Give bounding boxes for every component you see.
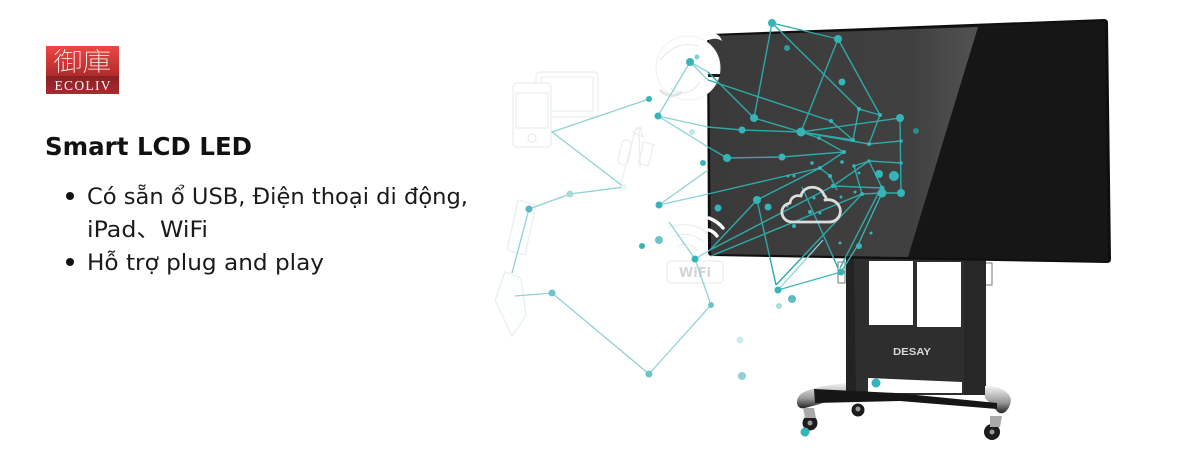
icon: cloud	[782, 187, 840, 222]
screen dark side	[709, 21, 1108, 261]
monitor frame	[707, 19, 1111, 263]
brand label: DESAY	[893, 346, 931, 358]
logo: Ecoliv	[46, 42, 119, 94]
corner highlight	[706, 33, 722, 41]
logo: Ecoliv: 御庫	[54, 42, 112, 79]
faint device icons	[495, 72, 723, 336]
icon: globe overlapping screen	[656, 36, 720, 100]
heading: Smart LCD LED	[45, 132, 252, 161]
network nodes	[526, 19, 919, 436]
icon: tablet	[536, 72, 598, 117]
logo: Ecoliv: ECOLIV	[54, 78, 111, 93]
stand crossbar	[814, 389, 997, 409]
stand brackets	[838, 262, 992, 285]
wifi arcs on screen	[709, 218, 723, 236]
bullet item: connectivity: Có sẵn ổ USB, Điện thoại di động,	[87, 184, 468, 210]
bullet item: connectivity: iPad、WiFi	[87, 218, 208, 243]
bullet item: connectivity	[66, 184, 468, 243]
icon: phone	[513, 83, 551, 147]
network lines: outer	[512, 62, 823, 374]
icon: usb connectors	[617, 127, 654, 187]
dark slot	[708, 74, 720, 77]
network lines: over screen	[708, 23, 901, 285]
wheels	[802, 404, 1002, 440]
stand columns and panel	[846, 258, 986, 395]
stand base arms	[797, 383, 846, 408]
stand	[797, 258, 1011, 440]
feature list	[66, 184, 468, 276]
network lines: lower	[778, 193, 882, 290]
screen glare	[709, 27, 978, 257]
wifi label: WiFi	[679, 266, 711, 281]
monitor	[656, 19, 1111, 263]
bullet item: plug and play: Hỗ trợ plug and play	[87, 250, 324, 276]
icon: card reader	[495, 200, 536, 336]
icon: wifi badge	[667, 225, 723, 283]
